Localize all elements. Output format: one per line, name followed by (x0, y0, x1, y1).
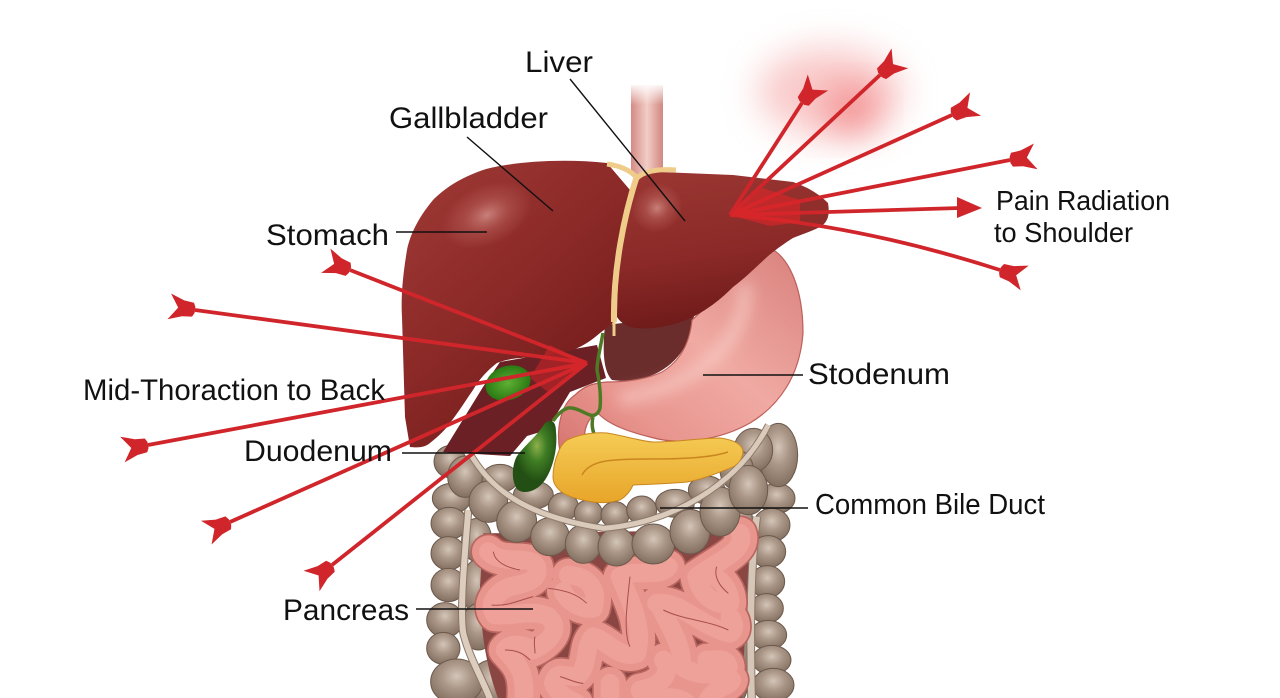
right lobe (402, 161, 630, 447)
small green gallbladder behind liver (481, 360, 535, 406)
label: Pain Radiation to Shoulder (994, 185, 1170, 248)
label: Gallbladder: Gallbladder (389, 102, 548, 135)
lesser sac cavity (604, 315, 694, 381)
shoulder pain glow (758, 48, 902, 136)
left lobe (617, 172, 829, 328)
stomach (559, 248, 803, 452)
colon and small intestine (427, 423, 798, 698)
label: Pain Radiation to Shoulder: to Shoulder (994, 217, 1133, 248)
label: Stodenum: Stodenum (808, 358, 950, 391)
label: Pain Radiation to Shoulder: Pain Radiation (996, 185, 1170, 216)
label: Mid-Thoraction to Back: Mid-Thoraction to Back (83, 374, 386, 407)
falciform ligament (607, 164, 676, 336)
gallbladder (513, 421, 556, 492)
arrows: pain radiation to shoulder (730, 48, 1038, 290)
crease details (492, 552, 728, 683)
label: Liver: Liver (525, 46, 593, 79)
transverse colon (434, 423, 798, 566)
esophagus (630, 83, 664, 175)
label: Pancreas: Pancreas (283, 594, 409, 627)
bile duct tree (553, 333, 603, 447)
outer colon columns (427, 473, 795, 698)
leader lines (396, 79, 808, 609)
intestine dark background (480, 530, 750, 698)
small intestine loops (488, 533, 741, 698)
label: Common Bile Duct: Common Bile Duct (815, 489, 1045, 521)
label: Duodenum: Duodenum (244, 435, 392, 468)
dark under-liver cavity (443, 345, 606, 456)
pancreas (553, 433, 743, 503)
liver (402, 161, 829, 447)
label: Stomach: Stomach (266, 219, 389, 252)
arrows: mid-thoracic to back (120, 249, 587, 591)
